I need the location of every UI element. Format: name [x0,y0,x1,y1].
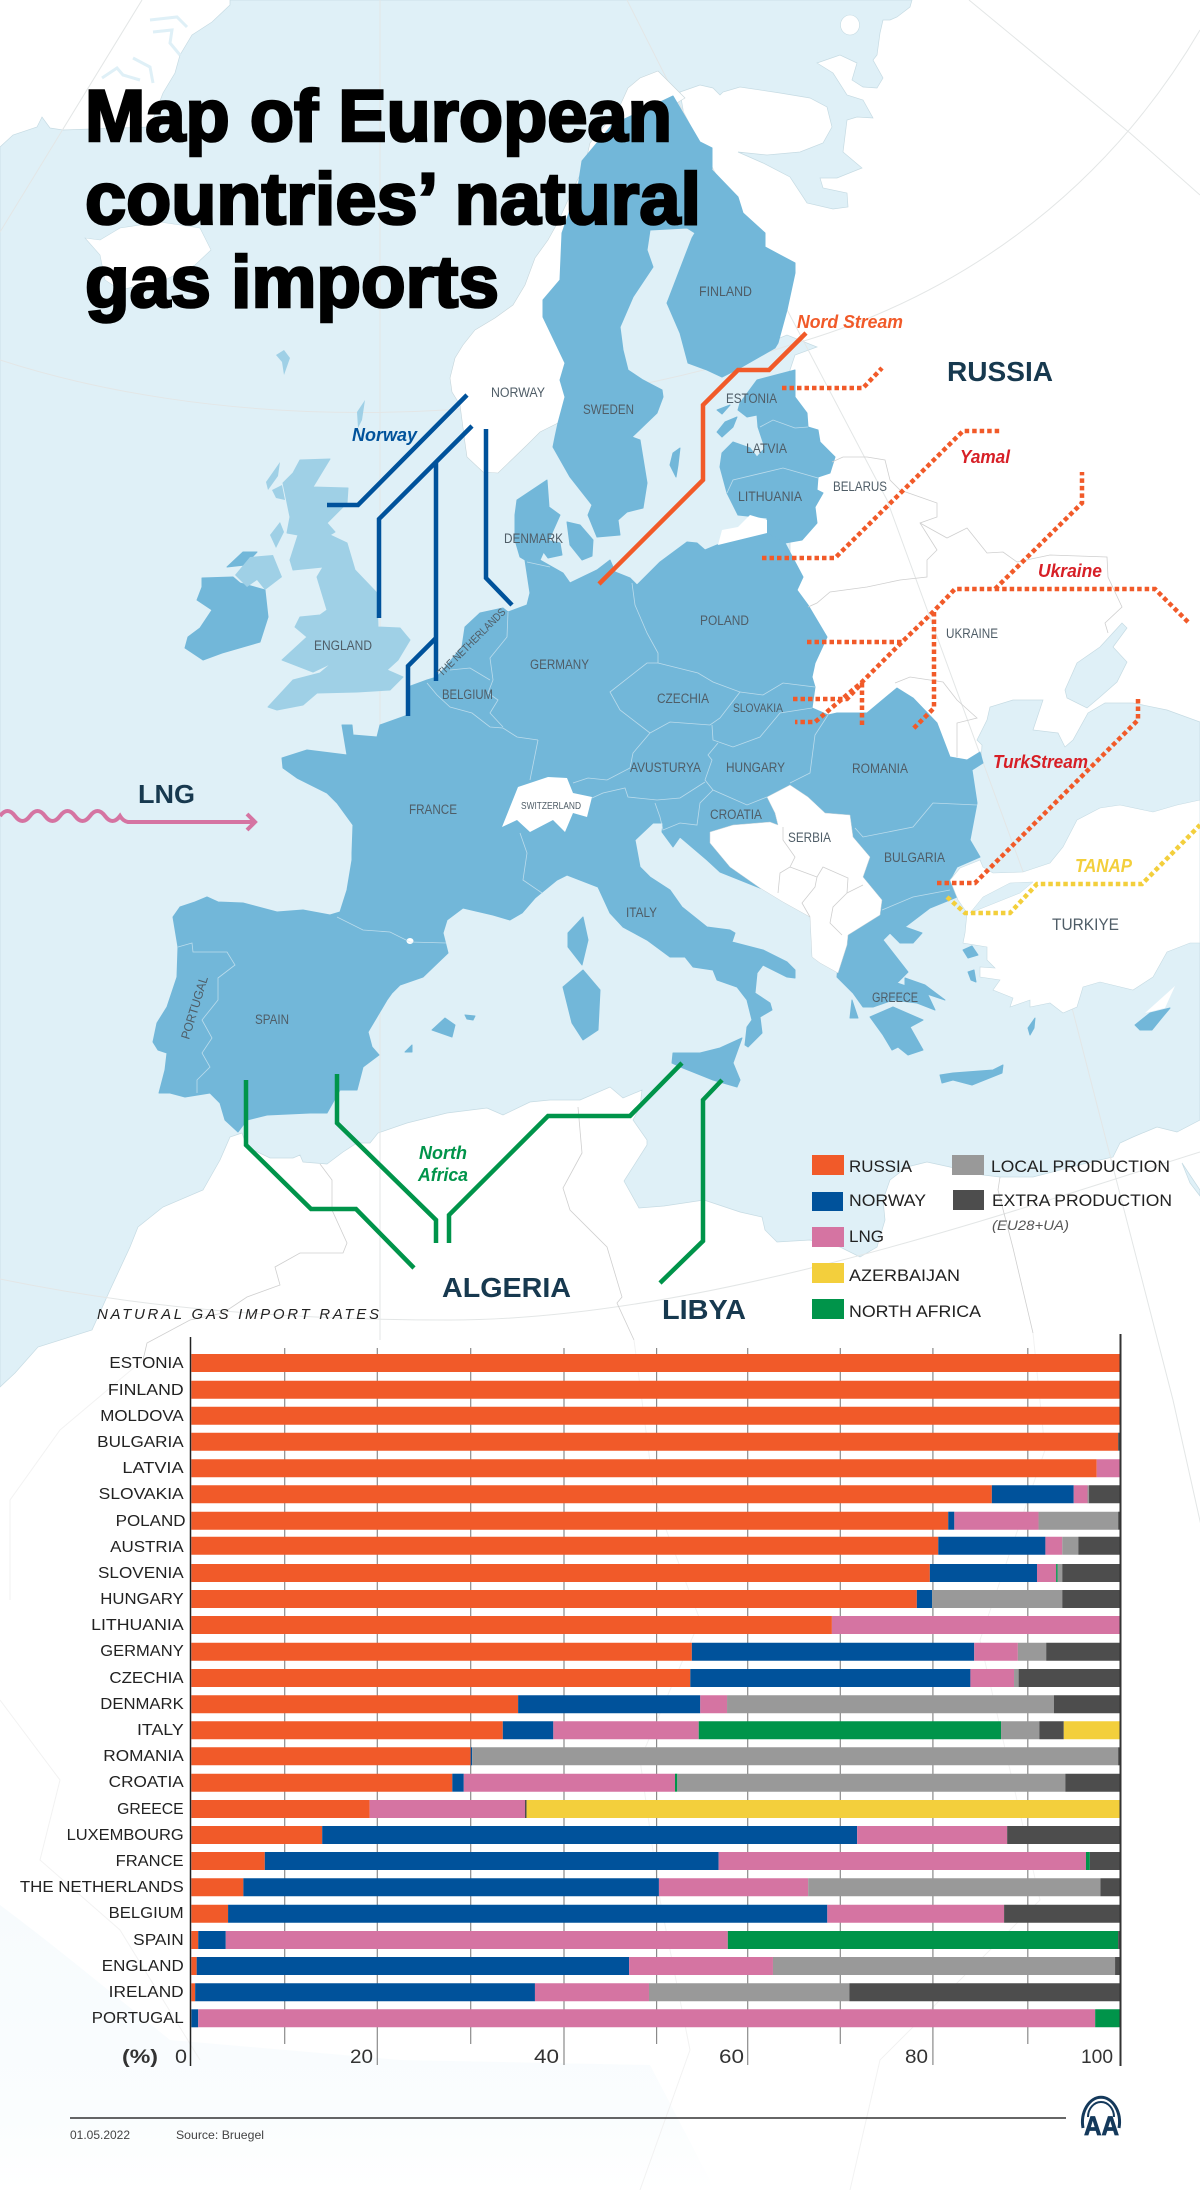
country labels: PORTUGAL [178,975,211,1041]
row: Germany [100,1643,1120,1661]
map: Baltic states [720,370,835,543]
country labels: SWEDEN [583,402,634,417]
country labels: BELARUS [833,479,887,494]
icon: AA logo [1082,2097,1120,2141]
row: Portugal: PORTUGAL [92,2010,184,2027]
map: graticule lines [0,0,1200,1700]
row: Greece [117,1800,1120,1818]
row: England [102,1957,1120,1975]
axis labels [122,2047,1113,2068]
row: Spain [133,1931,1120,1949]
country labels: CROATIA [710,807,762,822]
country labels: ESTONIA [726,391,777,406]
title: Map of European [85,76,672,157]
map: Scottish isles [266,350,365,548]
map: continental Europe [153,480,983,1132]
legend: RUSSIA [849,1157,913,1176]
country labels: FRANCE [409,802,457,817]
row: Czechia [109,1669,1120,1687]
row: Belgium [109,1905,1120,1923]
legend: AZERBAIJAN [849,1266,960,1285]
pipelines: Norway [327,395,512,716]
axis labels: 40 [534,2047,559,2068]
row: Luxembourg: LUXEMBOURG [67,1827,184,1844]
row: Denmark: DENMARK [100,1696,184,1713]
country labels: LITHUANIA [738,489,802,504]
row: Austria [110,1537,1120,1556]
country labels: SPAIN [255,1012,289,1027]
pipeline labels [352,312,1133,1185]
row: Finland [108,1381,1120,1399]
row: England: ENGLAND [102,1958,184,1975]
map: north Cyprus and Andorra [406,938,1175,1013]
title [85,76,701,323]
map: Kolguev island [840,15,860,35]
region labels: ALGERIA [442,1272,571,1303]
row: Spain: SPAIN [133,1932,184,1949]
map: borders on blue countries [178,420,977,1093]
country labels: DENMARK [504,531,563,546]
row: Lithuania [91,1616,1120,1634]
map: Norway [450,71,685,473]
country labels: BELGIUM [442,687,493,702]
icon: AA logo: AA [1084,2111,1119,2141]
row: France [116,1852,1120,1870]
region labels [138,356,1053,1325]
pipelines: northern Russian line [782,368,882,388]
row: Bulgaria: BULGARIA [97,1434,184,1451]
map: borders on white land [143,457,1122,1360]
legend [812,1155,1172,1321]
row: Slovakia: SLOVAKIA [99,1486,184,1503]
pipeline labels: Nord Stream [797,312,903,332]
row: Slovakia [99,1485,1120,1503]
row: Austria: AUSTRIA [110,1539,184,1556]
country labels: POLAND [700,613,749,628]
pipelines: Ukraine [793,472,1188,730]
region labels: LIBYA [662,1294,746,1325]
chart title: NATURAL GAS IMPORT RATES [97,1306,379,1323]
country labels [178,284,1119,1041]
legend: NORWAY [849,1191,926,1210]
footer: Source: Bruegel [176,2128,264,2142]
row: Slovenia [98,1564,1120,1582]
pipeline labels: Africa [417,1165,468,1185]
row: Latvia: LATVIA [122,1460,184,1477]
pipeline labels: Norway [352,425,418,445]
footer [70,2118,1066,2142]
country labels: TURKIYE [1052,915,1119,934]
map: white Iceland [85,222,211,290]
bar chart rows [20,1354,1120,2027]
pipelines: North Africa [246,1063,722,1283]
country labels: SWITZERLAND [521,800,581,812]
country labels: GERMANY [530,657,589,672]
row: Finland: FINLAND [108,1382,184,1399]
row: Bulgaria [97,1433,1120,1451]
map: Kaliningrad [718,515,767,545]
row: Italy: ITALY [137,1722,184,1739]
region labels: LNG [138,779,195,809]
map: Great Britain [268,459,410,710]
axis labels: 100 [1081,2047,1113,2068]
country labels: FINLAND [699,284,752,299]
country labels: THE NETHERLANDS [436,606,508,679]
faint land borders behind chart [0,1333,1045,2190]
row: Moldova [100,1407,1120,1425]
country labels: NORWAY [491,385,545,400]
pipelines: TurkStream [937,698,1138,883]
pipeline labels: TurkStream [993,752,1088,772]
country labels: SERBIA [788,830,831,845]
country labels: HUNGARY [726,760,785,775]
row: Slovenia: SLOVENIA [98,1565,184,1582]
map: Western Balkans [710,785,882,973]
legend: LNG [849,1227,884,1246]
pipeline labels: North [419,1143,467,1163]
map: Turkiye [950,800,1200,1013]
row: Lithuania: LITHUANIA [91,1617,184,1634]
legend: LOCAL PRODUCTION [991,1157,1170,1176]
footer: 01.05.2022 [70,2128,130,2142]
country labels: LATVIA [746,441,787,456]
LNG arrow [0,811,255,830]
row: Latvia [122,1459,1120,1477]
row: Luxembourg [67,1826,1120,1844]
axis labels: 0 [175,2047,187,2068]
map: European islands [185,405,1170,1087]
row: The Netherlands [20,1878,1120,1896]
region labels: RUSSIA [947,356,1053,387]
row: Czechia: CZECHIA [109,1670,184,1687]
title: gas imports [85,242,499,323]
pipelines: Yamal [762,431,1002,558]
row: The Netherlands: THE NETHERLANDS [20,1879,184,1896]
map: seas [0,0,1200,1387]
row: Estonia [109,1354,1120,1372]
map: Northern Ireland [235,555,282,590]
country labels: SLOVAKIA [733,701,783,715]
row: Belgium: BELGIUM [109,1905,184,1922]
pipeline labels: Yamal [960,447,1011,467]
pipeline labels: Ukraine [1038,561,1102,581]
row: Croatia: CROATIA [109,1774,184,1791]
background: faint lower sea [0,1905,715,2190]
country labels: ITALY [626,905,657,920]
axis labels: 80 [905,2047,928,2068]
row: Greece: GREECE [117,1801,184,1818]
axis labels: 20 [350,2047,373,2068]
row: Romania: ROMANIA [103,1748,184,1765]
row: France: FRANCE [116,1853,184,1870]
row: Germany: GERMANY [100,1643,184,1660]
axis labels: (%) [122,2047,158,2068]
title: countries’ natural [85,159,701,240]
country labels: CZECHIA [657,691,709,706]
country labels: ROMANIA [852,761,908,776]
row: Hungary: HUNGARY [100,1591,184,1608]
row: Poland: POLAND [116,1513,186,1530]
legend: EXTRA PRODUCTION [992,1191,1172,1210]
country labels: GREECE [872,990,918,1005]
axis labels: 60 [719,2047,744,2068]
row: Italy [137,1721,1120,1739]
pipelines: TANAP [947,825,1200,913]
row: Portugal [92,2009,1120,2027]
row: Ireland [109,1983,1120,2001]
row: Moldova: MOLDOVA [100,1408,184,1425]
country labels: ENGLAND [314,638,372,653]
legend: (EU28+UA) [992,1217,1069,1233]
map: Switzerland [502,777,592,832]
pipelines: Nord Stream [599,333,806,584]
chart grid ticks [285,1348,1028,2065]
chart axes [190,1334,1120,2066]
row: Poland [116,1512,1120,1530]
row: Estonia: ESTONIA [109,1355,184,1372]
map: Greenland fjords [102,17,187,83]
row: Romania [103,1747,1120,1765]
country labels: AVUSTURYA [630,760,701,775]
country labels: BULGARIA [884,850,945,865]
row: Hungary [100,1590,1120,1608]
row: Ireland: IRELAND [109,1984,184,2001]
pipeline labels: TANAP [1075,856,1133,876]
legend: NORTH AFRICA [849,1302,982,1321]
row: Denmark [100,1695,1120,1713]
country labels: UKRAINE [946,626,998,641]
row: Croatia [109,1774,1120,1792]
map: Sweden and Finland [543,96,795,537]
map: Sea of Marmara [970,882,1033,913]
